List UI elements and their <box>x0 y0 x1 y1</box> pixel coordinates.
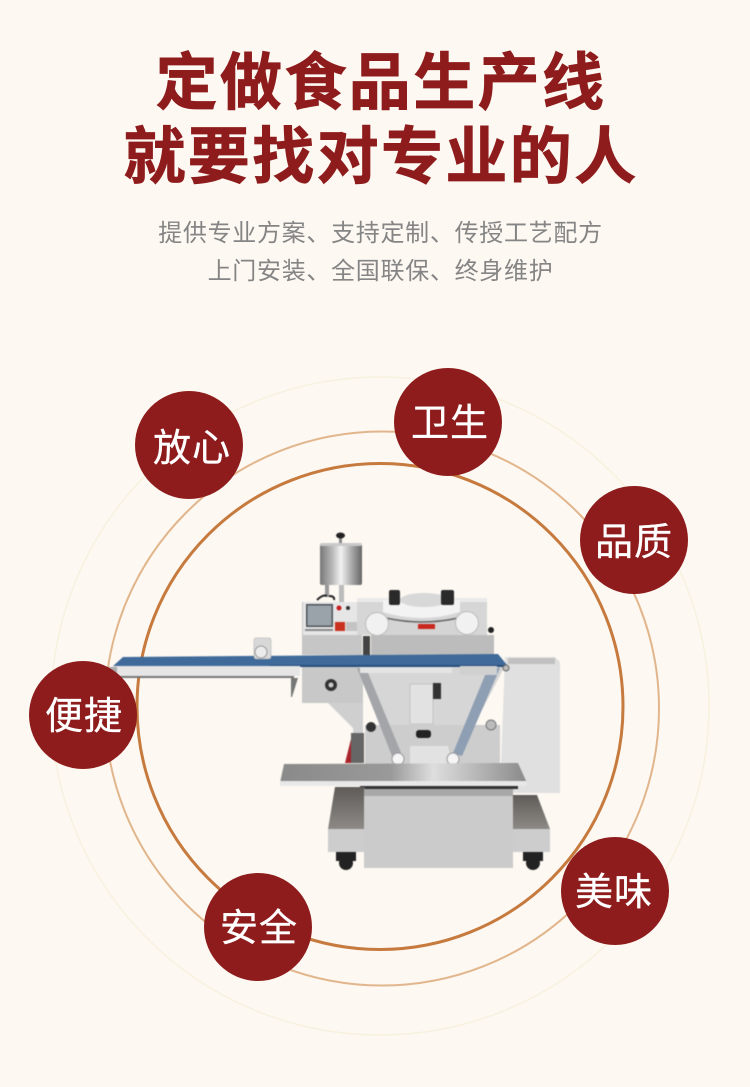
subtitle text: 提供专业方案、支持定制、传授工艺配方 <box>158 220 603 247</box>
subtitle text <box>158 220 603 285</box>
base and casters <box>328 787 550 870</box>
title: 就要找对专业的人 <box>123 123 639 192</box>
badge: 安全 <box>204 873 312 981</box>
side cabinet <box>500 657 560 793</box>
control panel <box>302 602 362 655</box>
badge: 美味: 美味 <box>575 872 653 914</box>
badge: 美味 <box>561 837 669 945</box>
subtitle text: 上门安装、全国联保、终身维护 <box>208 258 553 285</box>
badge: 品质 <box>580 486 688 594</box>
conveyor belt <box>107 638 509 697</box>
badge: 放心 <box>135 391 243 499</box>
title <box>123 49 639 192</box>
machine body <box>302 665 505 765</box>
badge: 安全: 安全 <box>220 908 298 950</box>
badge: 便捷: 便捷 <box>45 696 123 738</box>
hopper <box>317 532 362 602</box>
badge: 放心: 放心 <box>153 428 231 470</box>
badge: 便捷 <box>29 661 137 769</box>
drip tray <box>280 763 527 789</box>
badge: 卫生: 卫生 <box>411 403 489 445</box>
forming head <box>357 590 494 655</box>
badge: 品质: 品质 <box>595 522 673 564</box>
badge: 卫生 <box>394 368 502 476</box>
title: 定做食品生产线 <box>156 49 606 118</box>
